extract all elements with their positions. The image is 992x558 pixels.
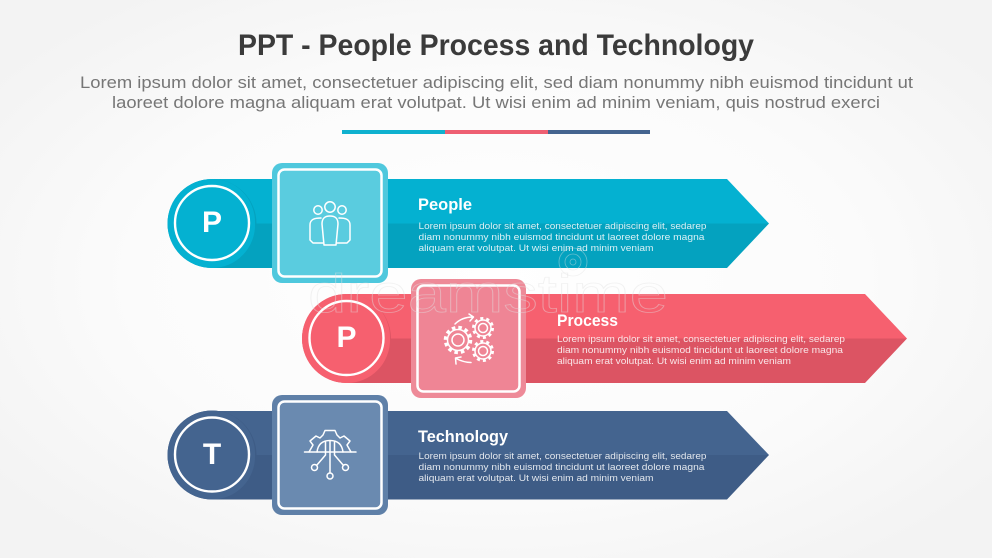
description: people: aliquam erat volutpat. Ut wisi enim ad minim veniam <box>418 243 654 254</box>
description: people <box>418 221 706 254</box>
description: process: diam nonummy nibh euismod tincidunt ut laoreet dolore magna <box>557 345 844 356</box>
heading: people: People <box>418 195 472 214</box>
description: technology: Lorem ipsum dolor sit amet, consectetuer adipiscing elit, sedarep <box>418 451 706 462</box>
letter badge: T <box>167 410 256 500</box>
heading: process: Process <box>557 311 618 330</box>
icon: gear circuit <box>304 430 356 479</box>
description: process: Lorem ipsum dolor sit amet, consectetuer adipiscing elit, sedarep <box>557 334 845 345</box>
description: technology: diam nonummy nibh euismod tincidunt ut laoreet dolore magna <box>418 462 705 473</box>
icon card: process <box>411 279 526 398</box>
panel: technology <box>167 395 769 515</box>
description: technology: aliquam erat volutpat. Ut wisi enim ad minim veniam <box>418 473 654 484</box>
arrow banner: people <box>212 179 769 268</box>
panel: people <box>167 163 769 283</box>
subtitle text block: laoreet dolore magna aliquam erat volutpat. Ut wisi enim ad minim veniam, quis nostrud exerci <box>112 93 880 112</box>
letter badge: P <box>167 179 256 268</box>
title: PPT - People Process and Technology <box>238 29 754 62</box>
description: process: aliquam erat volutpat. Ut wisi enim ad minim veniam <box>557 356 791 367</box>
letter badge: T: T <box>203 438 221 471</box>
description: process <box>557 334 845 367</box>
icon: people group <box>310 202 350 245</box>
letter badge: P: P <box>336 321 357 354</box>
description: people: Lorem ipsum dolor sit amet, consectetuer adipiscing elit, sedarep <box>418 221 706 232</box>
watermark <box>308 248 668 324</box>
letter badge: P: P <box>202 206 222 239</box>
arrow banner: technology <box>212 411 769 500</box>
icon card: people <box>272 163 388 283</box>
icon card: technology <box>272 395 388 515</box>
subtitle text block <box>80 73 913 112</box>
watermark: dreamstime <box>308 264 668 324</box>
letter badge: P <box>302 294 391 383</box>
arrow banner: process <box>347 294 907 383</box>
subtitle text block: Lorem ipsum dolor sit amet, consectetuer adipiscing elit, sed diam nonummy nibh euismod tincidunt ut <box>80 73 913 92</box>
icon: gears <box>446 314 492 364</box>
heading: technology: Technology <box>418 427 509 446</box>
description: people: diam nonummy nibh euismod tincidunt ut laoreet dolore magna <box>418 232 705 243</box>
panel: process <box>302 279 907 398</box>
tri-colour divider <box>342 130 650 134</box>
description: technology <box>418 451 706 484</box>
